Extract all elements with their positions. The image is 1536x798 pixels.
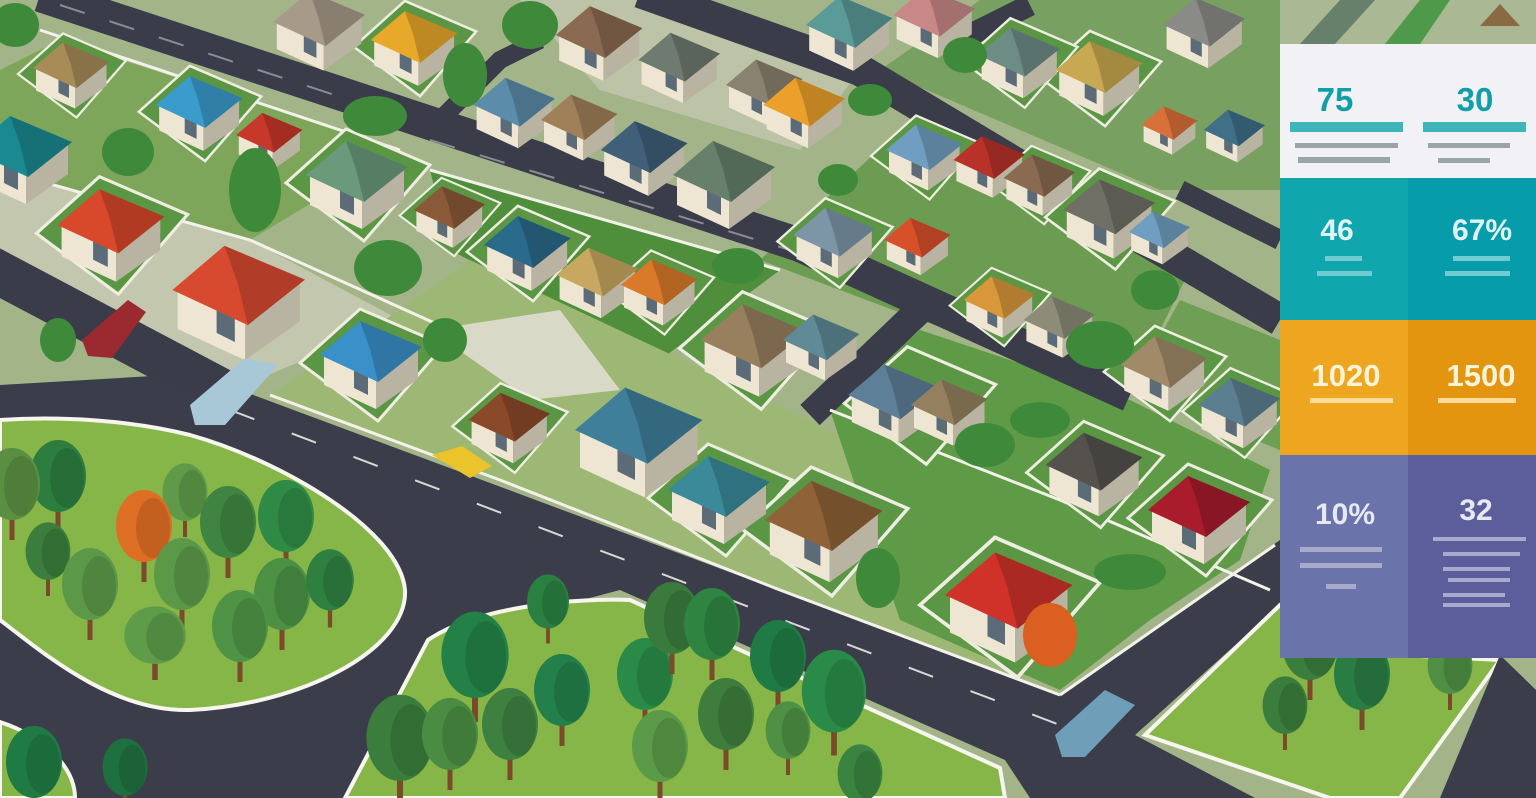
house — [33, 42, 110, 108]
card: teal — [1280, 178, 1536, 320]
house — [320, 321, 422, 409]
stat 1020: 1020 — [1312, 358, 1380, 393]
card: white — [1280, 44, 1536, 178]
house — [954, 136, 1025, 198]
tree — [254, 558, 310, 650]
house — [556, 6, 642, 81]
tree — [154, 538, 210, 630]
stat 1500: 1500 — [1447, 358, 1515, 393]
house — [1056, 41, 1142, 116]
stat 32: 32 — [1459, 494, 1493, 527]
tree — [62, 548, 118, 640]
house — [673, 141, 775, 229]
tree — [124, 606, 186, 680]
tree — [258, 480, 314, 572]
house — [763, 78, 845, 148]
house — [621, 260, 698, 326]
right bottom park — [1145, 605, 1536, 798]
stat 10: 10% — [1315, 498, 1375, 531]
tree: orange — [116, 490, 172, 582]
house plots — [18, 1, 1298, 677]
house — [1129, 212, 1190, 264]
house — [964, 276, 1035, 338]
bottom left park — [0, 722, 147, 798]
house — [848, 364, 940, 444]
house — [945, 552, 1072, 662]
house — [484, 216, 570, 291]
tree — [1263, 676, 1307, 750]
house — [414, 186, 485, 248]
house — [893, 0, 975, 58]
house — [1063, 179, 1155, 259]
house — [1141, 106, 1198, 155]
tree — [422, 698, 478, 790]
house — [726, 60, 802, 126]
house — [601, 121, 688, 196]
house — [978, 28, 1060, 98]
tree — [163, 463, 207, 537]
tree — [366, 695, 434, 798]
tree — [103, 738, 147, 798]
tree — [26, 522, 70, 596]
house — [668, 456, 770, 544]
house — [1204, 110, 1265, 162]
car: yellow — [432, 446, 492, 478]
tree — [766, 701, 810, 775]
house — [273, 0, 365, 71]
car: red — [82, 300, 146, 358]
vehicles — [82, 300, 1135, 757]
tree — [30, 440, 86, 532]
tree — [838, 744, 882, 798]
house — [156, 76, 242, 151]
house — [886, 124, 962, 190]
card: purple — [1280, 455, 1536, 658]
tree — [617, 638, 673, 730]
tree — [750, 620, 806, 712]
left park — [0, 419, 405, 710]
house — [1004, 154, 1075, 216]
tree — [632, 710, 688, 798]
house — [783, 314, 860, 380]
house — [1121, 336, 1208, 411]
top right map strip — [1280, 0, 1536, 44]
bus: pale blue — [190, 358, 278, 425]
house — [1198, 378, 1280, 448]
stat 75: 75 — [1317, 81, 1353, 118]
house — [1148, 476, 1250, 564]
card: orange — [1280, 320, 1536, 455]
teal label bars — [1290, 122, 1526, 132]
house — [473, 78, 555, 148]
tree — [200, 486, 256, 578]
house — [468, 393, 550, 463]
house — [806, 0, 892, 71]
house — [700, 304, 808, 397]
stats panel — [1280, 44, 1536, 658]
stat 30: 30 — [1457, 81, 1493, 118]
hedges and bushes — [0, 1, 1179, 608]
house — [236, 113, 302, 170]
stat 46: 46 — [1320, 214, 1354, 247]
bottom centre park — [345, 574, 1005, 798]
van: blue — [1055, 690, 1135, 757]
tree — [0, 448, 40, 540]
house — [1163, 0, 1245, 68]
tree: orange autumn — [1023, 603, 1077, 667]
house — [172, 246, 305, 360]
stat 67: 67% — [1452, 214, 1512, 247]
tree — [6, 726, 62, 798]
house — [57, 189, 164, 282]
tree — [527, 574, 569, 644]
tree — [684, 588, 740, 680]
houses — [0, 0, 1280, 663]
house — [306, 141, 408, 229]
caption bars — [1310, 398, 1516, 403]
house — [0, 116, 72, 204]
tree — [212, 590, 268, 682]
house — [638, 33, 720, 103]
white kerb lines — [0, 30, 1275, 695]
caption bars — [1300, 537, 1526, 607]
caption bars — [1317, 256, 1510, 276]
tree — [802, 650, 866, 756]
house — [541, 94, 618, 160]
grey caption bars — [1295, 143, 1510, 163]
tree — [534, 654, 590, 746]
house — [371, 11, 458, 86]
tree — [1282, 608, 1338, 700]
house — [575, 388, 702, 498]
tree — [1334, 638, 1390, 730]
neighbourhood blocks — [0, 0, 1280, 690]
tree — [441, 612, 509, 722]
tree — [1428, 636, 1472, 710]
house — [793, 208, 875, 278]
house — [765, 481, 882, 582]
tree — [698, 678, 754, 770]
house — [556, 248, 638, 318]
tree — [482, 688, 538, 780]
tree — [306, 549, 354, 628]
house — [1024, 296, 1095, 358]
house — [1046, 433, 1142, 516]
house — [911, 380, 988, 446]
house — [884, 218, 950, 275]
tree — [644, 582, 700, 674]
